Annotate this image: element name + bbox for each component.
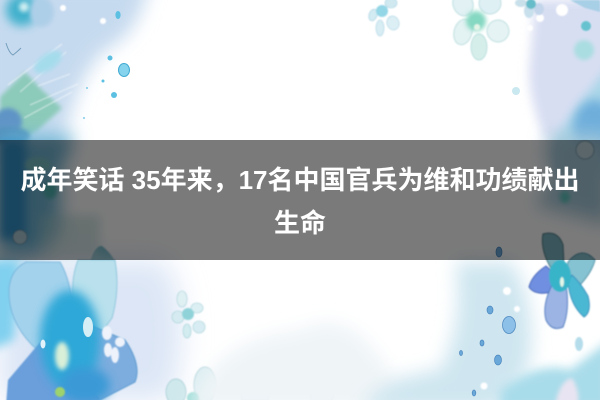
flower: right blue (529, 233, 595, 328)
flower: bottom left large (0, 260, 181, 400)
flowers: bottom edge (166, 367, 334, 400)
flower: top large (449, 0, 509, 60)
wash: top right (512, 0, 600, 175)
grey title banner (0, 140, 600, 260)
flower: top right small (515, 0, 544, 18)
wash: left of banner (0, 135, 115, 262)
wash: top left (0, 0, 150, 150)
wash: right of banner (535, 135, 600, 225)
brush strokes: top left (0, 44, 78, 145)
flower: small bottom centre (172, 291, 205, 338)
drops: top left (83, 11, 130, 119)
drops: bottom right (460, 247, 516, 396)
flower: top small (367, 0, 401, 36)
title: 成年笑话 35年来，17名中国官兵为维和功绩献出生命 (20, 165, 580, 238)
wash: bottom right (190, 262, 600, 400)
